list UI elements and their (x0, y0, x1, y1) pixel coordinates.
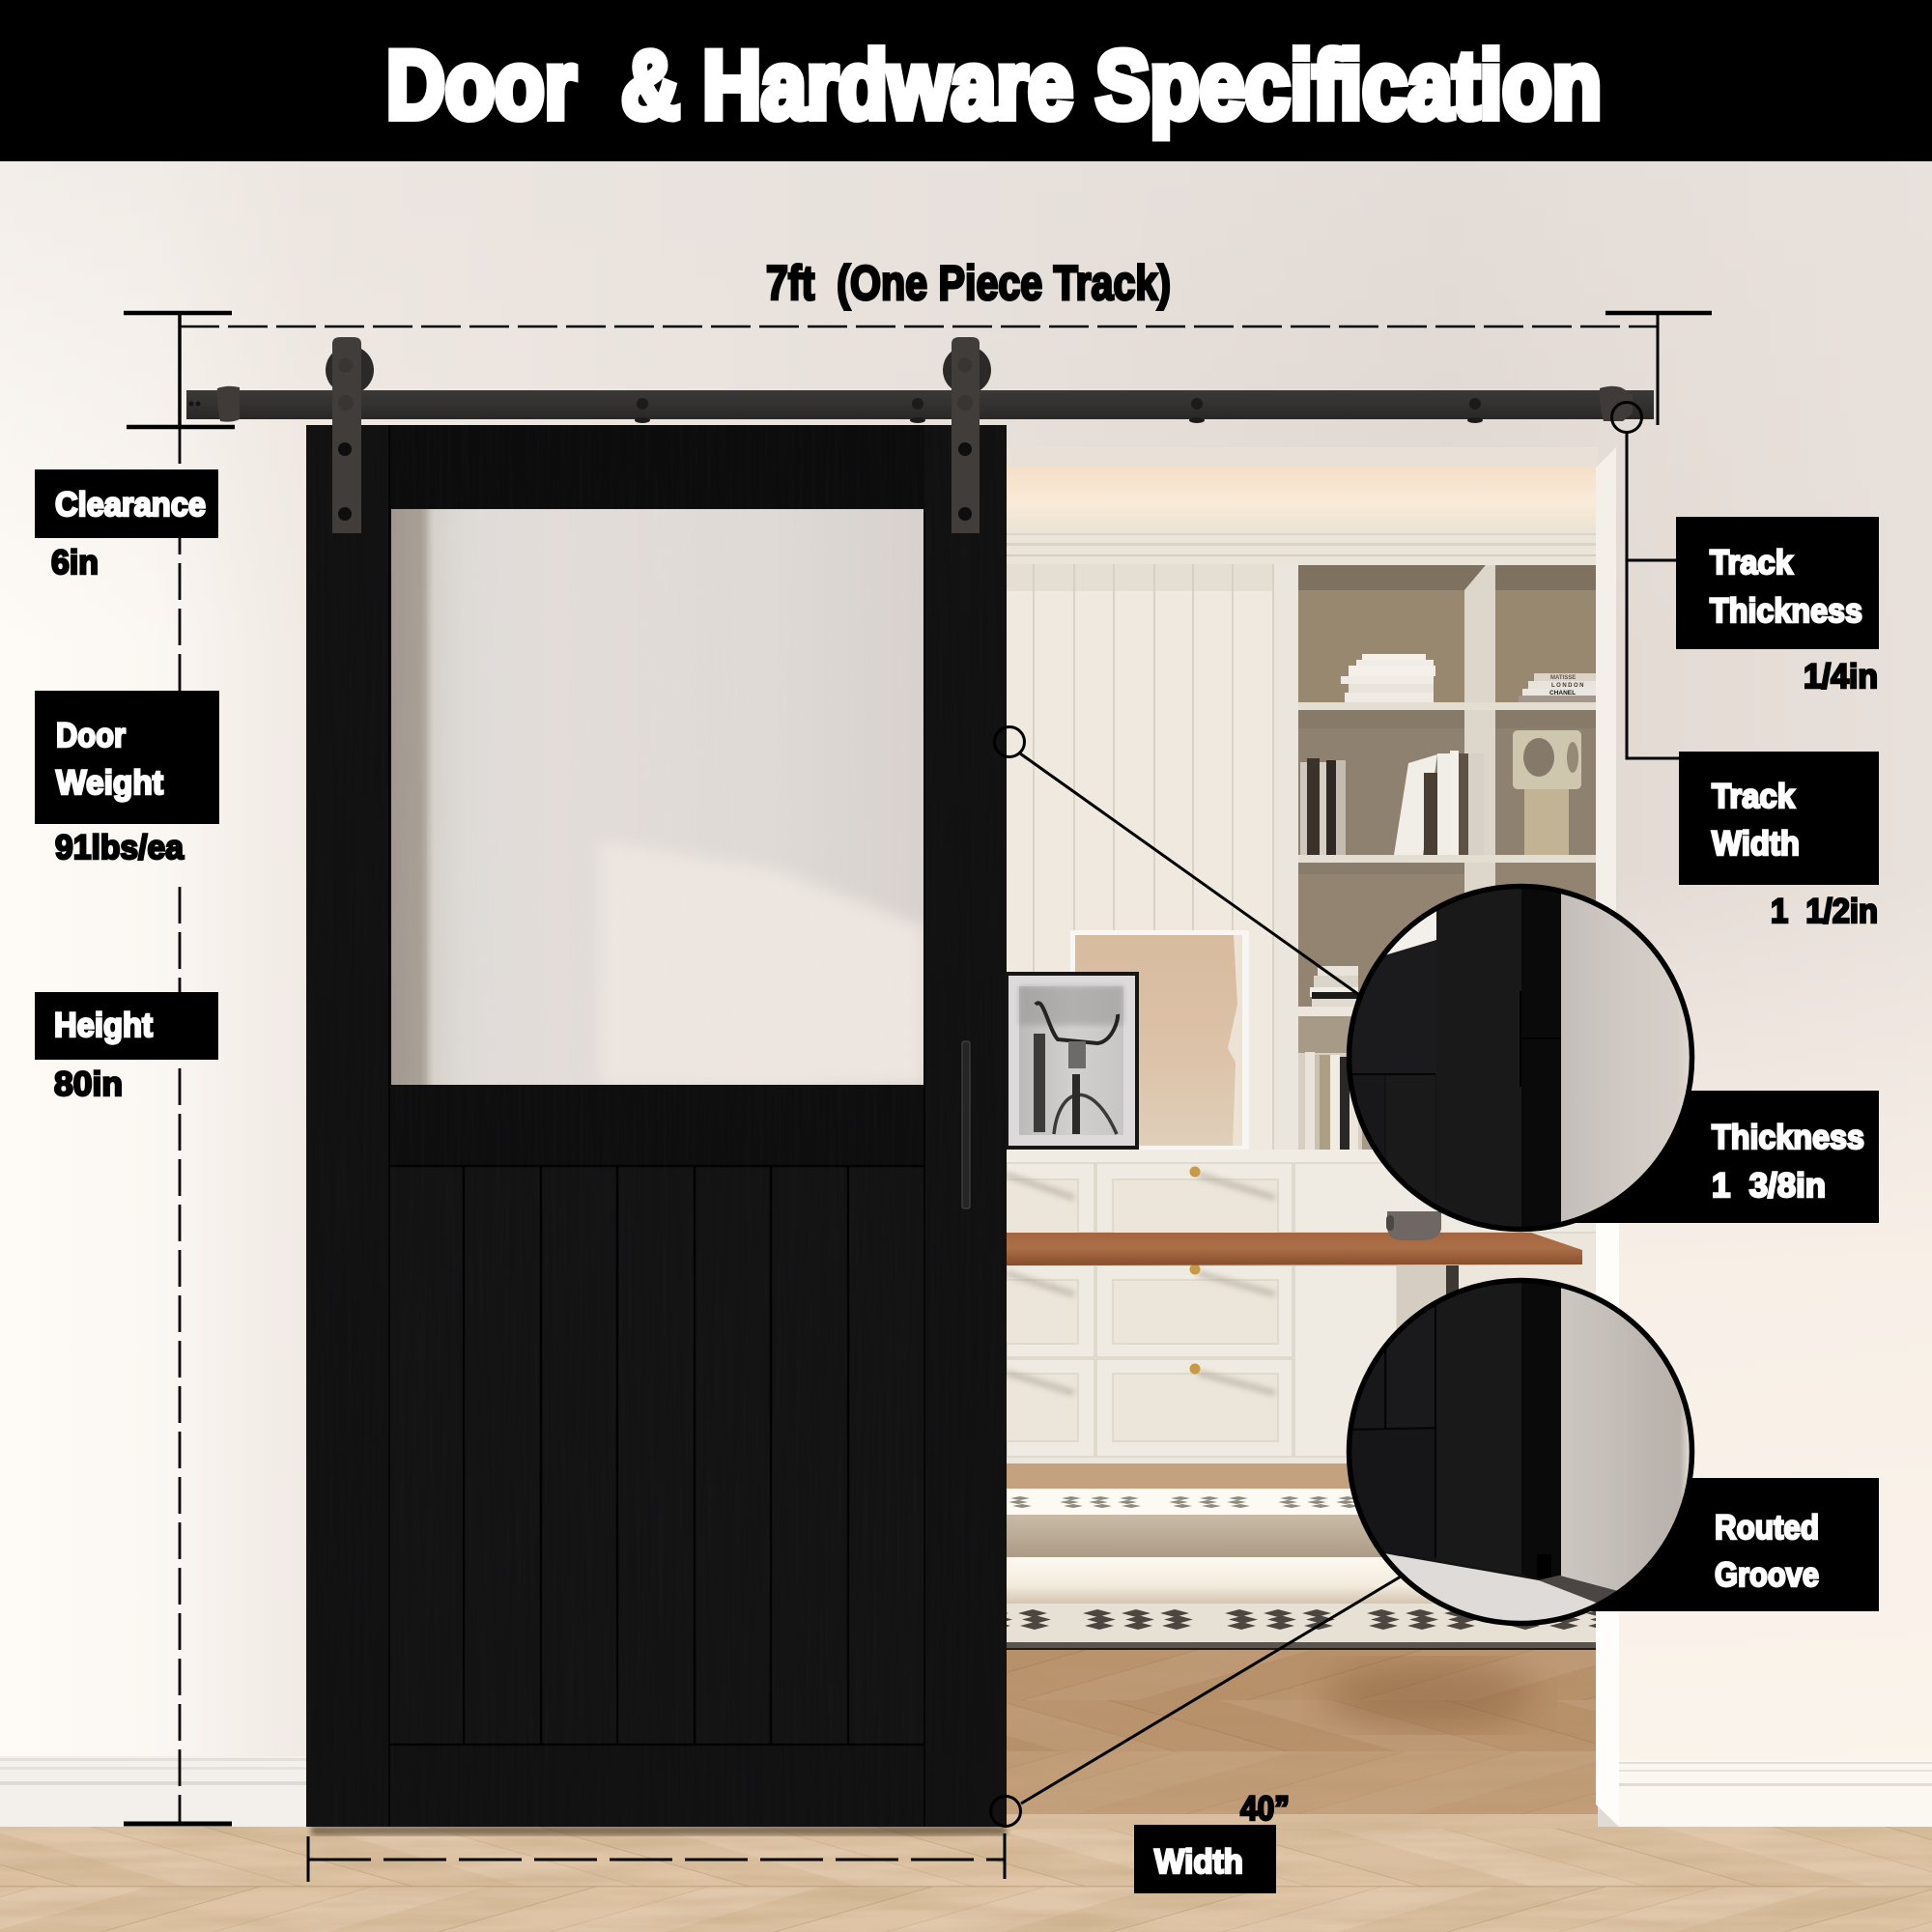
right roller hanger (943, 337, 991, 533)
label: track thickness: Track (1710, 544, 1793, 582)
opening jamb (1596, 447, 1619, 1827)
panelled shiplap wall (1007, 564, 1287, 1163)
label: clearance (35, 469, 218, 538)
baseboard left (0, 1756, 307, 1827)
label: routed groove: Routed (1715, 1509, 1819, 1547)
label: height (35, 992, 218, 1060)
value: 91lbs/ea: 91lbs/ea (55, 829, 185, 867)
middle rail (389, 1085, 924, 1166)
label: track thickness: Thickness (1710, 592, 1862, 630)
bookcase (1274, 564, 1598, 1163)
top rail (389, 425, 924, 508)
title: Door & Hardware Specification (386, 31, 1602, 138)
left roller hanger (326, 337, 374, 533)
wood table top (1007, 1233, 1582, 1265)
height dimension line (124, 313, 235, 1824)
mug (1386, 1211, 1441, 1240)
sliding track (186, 386, 1654, 423)
marker and leader to groove detail (991, 1577, 1401, 1826)
label: thickness (1570, 1091, 1879, 1223)
leaning watercolour print (1070, 930, 1249, 1150)
value: 80in: 80in (54, 1065, 123, 1103)
track length label: 7ft (One Piece Track) (766, 256, 1171, 310)
bottom rail (389, 1745, 924, 1827)
header bar (0, 0, 1932, 161)
door pull handle (962, 1041, 970, 1208)
glass panel (391, 509, 924, 1085)
label: door weight: Door (56, 717, 126, 754)
room seen through the opening (1005, 447, 1598, 1829)
framed bicycle photo (1005, 972, 1139, 1150)
value: 1 1/2in: 1 1/2in (1771, 893, 1878, 930)
crown moulding (1007, 527, 1598, 564)
counter and cabinets (1005, 1150, 1598, 1463)
stacked books right shelf (1519, 673, 1598, 702)
magnifier: door thickness detail (1343, 879, 1706, 1239)
upright books middle shelf (1300, 751, 1484, 855)
baseboard right (1619, 1760, 1932, 1827)
stacked books top shelf (1341, 654, 1435, 702)
label: door weight (35, 691, 219, 824)
label: door weight: Weight (56, 764, 163, 802)
books lower shelf (1298, 966, 1362, 1150)
label: thickness: 1 3/8in (1712, 1167, 1826, 1205)
foreground oak floor (0, 1826, 1932, 1932)
value: 6in: 6in (51, 544, 99, 582)
label: clearance: Clearance (55, 486, 206, 524)
label: height: Height (54, 1007, 153, 1044)
label: track width (1679, 752, 1879, 885)
value: 40 inches: 40” (1240, 1790, 1290, 1828)
label: track width: Width (1712, 825, 1800, 863)
patterned rug (1007, 1489, 1598, 1650)
label: routed groove: Groove (1715, 1556, 1819, 1594)
value: 1/4in: 1/4in (1804, 658, 1878, 696)
stacked books right shelf: MATISSE (1550, 675, 1576, 681)
magnifier: routed groove detail (1343, 1275, 1706, 1633)
label: width: Width (1154, 1843, 1243, 1881)
sculpture (1513, 730, 1581, 855)
stacked books right shelf: LONDON (1551, 683, 1585, 689)
label: thickness: Thickness (1712, 1119, 1864, 1156)
barn door (306, 425, 1007, 1827)
inner room floor (1007, 1463, 1598, 1829)
soffit and cove light (1007, 447, 1598, 527)
label: track thickness (1676, 517, 1879, 649)
right track stop (1600, 386, 1633, 421)
track bolts (635, 398, 1483, 423)
label: width (1134, 1825, 1276, 1893)
label: routed groove (1584, 1478, 1879, 1611)
stacked books right shelf: CHANEL (1549, 690, 1576, 696)
width dimension line (308, 1833, 1005, 1882)
marker and leader to thickness detail (995, 726, 1362, 997)
track detail marker and leader lines (1611, 402, 1679, 758)
vertical plank panel (389, 1166, 924, 1745)
label: track width: Track (1712, 778, 1795, 815)
left track stop (217, 386, 240, 422)
